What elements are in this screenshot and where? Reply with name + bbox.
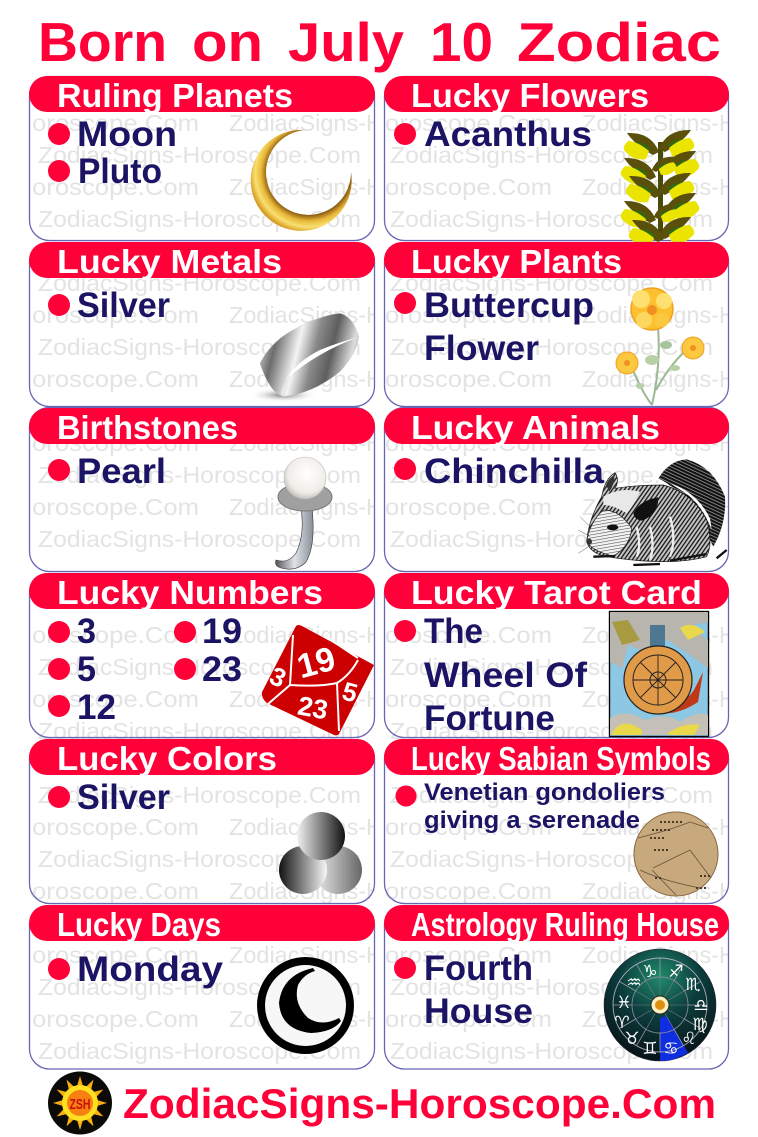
list: buttercup flower: Flower bbox=[424, 329, 539, 368]
text: ZodiacSigns-Horoscope.Com bbox=[390, 718, 713, 744]
icon: sabian chart disc bbox=[634, 812, 718, 896]
heading: lucky flowers bbox=[384, 76, 729, 114]
icon: zodiac wheel: ♑︎ bbox=[642, 962, 658, 982]
heading: lucky animals bbox=[384, 408, 729, 446]
list: numbers: 3 bbox=[77, 612, 96, 651]
icon: zodiac wheel: ♍︎ bbox=[692, 1015, 708, 1035]
icon: red dice bbox=[262, 625, 374, 735]
panel: lucky days bbox=[29, 905, 375, 1069]
list: buttercup flower bbox=[394, 286, 594, 368]
icon: zodiac wheel: ♏︎ bbox=[685, 975, 701, 995]
text: ZodiacSigns-H bbox=[229, 110, 383, 136]
text: oroscope.Com bbox=[385, 878, 552, 904]
list: moon, pluto: Pluto bbox=[78, 152, 162, 191]
text: oroscope.Com bbox=[32, 942, 199, 968]
heading: lucky plants: Lucky Plants bbox=[411, 243, 622, 280]
text: ZodiacSigns-Horoscope.Com bbox=[390, 462, 713, 488]
heading: lucky numbers bbox=[29, 573, 375, 611]
title: on bbox=[192, 11, 263, 73]
list: the wheel of fortune: The bbox=[424, 612, 483, 651]
icon: zodiac wheel bbox=[604, 949, 716, 1061]
text: ZodiacSigns-H bbox=[229, 942, 383, 968]
icon: zodiac wheel: ♐︎ bbox=[668, 962, 684, 982]
text: ZodiacSigns-H bbox=[229, 366, 383, 392]
icon: zodiac wheel: ♎︎ bbox=[693, 996, 709, 1016]
text: ZodiacSigns-H bbox=[582, 1006, 736, 1032]
list: moon, pluto: Moon bbox=[77, 115, 177, 154]
text: ZodiacSigns-H bbox=[229, 814, 383, 840]
heading: birthstones bbox=[29, 408, 375, 446]
icon: acanthus flower bbox=[621, 130, 699, 246]
text: ZodiacSigns-Horoscope.Com bbox=[390, 270, 713, 296]
text: ZodiacSigns-H bbox=[229, 622, 383, 648]
panel: birthstones bbox=[29, 408, 375, 572]
text: oroscope.Com bbox=[32, 302, 199, 328]
list: the wheel of fortune: Wheel Of bbox=[424, 656, 587, 695]
panel: astrology ruling house bbox=[384, 905, 729, 1069]
text: oroscope.Com bbox=[32, 366, 199, 392]
text: oroscope.Com bbox=[32, 494, 199, 520]
list: buttercup flower: Buttercup bbox=[424, 286, 594, 325]
text: ZodiacSigns-H bbox=[229, 430, 383, 456]
text: ZodiacSigns-H bbox=[229, 1006, 383, 1032]
text: ZodiacSigns-Horoscope.Com bbox=[390, 654, 713, 680]
icon: chinchilla sketch bbox=[578, 459, 727, 565]
text: oroscope.Com bbox=[385, 430, 552, 456]
panel: lucky tarot card bbox=[384, 573, 729, 738]
text: ZodiacSigns-H bbox=[229, 302, 383, 328]
text: oroscope.Com bbox=[385, 814, 552, 840]
text: oroscope.Com bbox=[385, 622, 552, 648]
heading: lucky days bbox=[29, 905, 375, 943]
text: ZodiacSigns-Horoscope.Com bbox=[38, 526, 361, 552]
title bbox=[38, 11, 721, 73]
icon: zodiac wheel: ♋︎ bbox=[663, 1039, 679, 1059]
text: ZodiacSigns-H bbox=[582, 366, 736, 392]
text: ZodiacSigns-H bbox=[582, 174, 736, 200]
text: ZodiacSigns-Horoscope.Com bbox=[38, 142, 361, 168]
panel: lucky numbers bbox=[29, 573, 375, 738]
icon: zodiac wheel: ♓︎ bbox=[616, 993, 632, 1013]
list: numbers: 23 bbox=[202, 650, 242, 689]
text: ZodiacSigns-Horoscope.Com bbox=[38, 782, 361, 808]
text: ZodiacSigns-H bbox=[582, 494, 736, 520]
list: numbers: 19 bbox=[202, 612, 242, 651]
heading: lucky animals: Lucky Animals bbox=[411, 409, 660, 446]
heading: birthstones: Birthstones bbox=[57, 409, 238, 446]
text: ZodiacSigns-H bbox=[582, 942, 736, 968]
icon: red dice: 19 bbox=[293, 640, 339, 686]
panel: ruling planets bbox=[29, 76, 375, 240]
list: silver: Silver bbox=[77, 286, 170, 325]
text: ZodiacSigns-Horoscope.Com bbox=[390, 142, 713, 168]
text: ZodiacSigns-Horoscope.Com bbox=[38, 270, 361, 296]
list: the wheel of fortune: Fortune bbox=[424, 699, 555, 738]
text: ZodiacSigns-Horoscope.Com bbox=[38, 974, 361, 1000]
panel: lucky plants bbox=[384, 242, 729, 406]
list: numbers bbox=[48, 612, 242, 727]
heading: ruling planets bbox=[29, 76, 375, 114]
icon: red dice: 3 bbox=[265, 660, 291, 694]
text: oroscope.Com bbox=[385, 942, 552, 968]
text: ZodiacSigns-Horoscope.Com bbox=[390, 782, 713, 808]
text: ZodiacSigns-Horoscope.Com bbox=[38, 334, 361, 360]
icon: red dice: 5 bbox=[339, 676, 361, 708]
heading: lucky metals bbox=[29, 242, 375, 280]
text: ZodiacSigns-Horoscope.Com bbox=[390, 1038, 713, 1064]
text: oroscope.Com bbox=[385, 494, 552, 520]
text: ZodiacSigns-Horoscope.Com bbox=[38, 718, 361, 744]
text: ZodiacSigns-H bbox=[582, 814, 736, 840]
text: oroscope.Com bbox=[385, 1006, 552, 1032]
text: oroscope.Com bbox=[385, 302, 552, 328]
text: ZodiacSigns-Horoscope.Com bbox=[38, 462, 361, 488]
text: oroscope.Com bbox=[32, 110, 199, 136]
list: numbers: 5 bbox=[77, 650, 96, 689]
text: ZodiacSigns-Horoscope.Com bbox=[38, 1038, 361, 1064]
heading: lucky numbers: Lucky Numbers bbox=[57, 574, 323, 611]
list: acanthus: Acanthus bbox=[424, 115, 592, 154]
panel: lucky flowers bbox=[384, 76, 729, 246]
text: ZodiacSigns-H bbox=[229, 494, 383, 520]
text: ZodiacSigns-Horoscope.Com bbox=[390, 974, 713, 1000]
title: 10 bbox=[430, 11, 493, 73]
text: ZodiacSigns-Horoscope.Com bbox=[390, 526, 713, 552]
icon: silver ring bbox=[248, 313, 359, 402]
list: venetian gondoliers: Venetian gondoliers bbox=[424, 779, 665, 806]
text: oroscope.Com bbox=[32, 686, 199, 712]
footer website text: ZodiacSigns-Horoscope.Com bbox=[123, 1080, 716, 1127]
title: Born bbox=[38, 11, 167, 73]
heading: ruling planets: Ruling Planets bbox=[57, 77, 293, 114]
icon: silver gradient circles bbox=[279, 812, 362, 894]
icon: black crescent in circle bbox=[261, 961, 350, 1050]
text: ZodiacSigns-Horoscope.Com bbox=[390, 846, 713, 872]
text: ZodiacSigns-H bbox=[582, 686, 736, 712]
icon: zodiac wheel: ♈︎ bbox=[614, 1013, 630, 1033]
list: fourth house: House bbox=[424, 992, 533, 1031]
icon: wheel of fortune tarot card bbox=[610, 612, 708, 736]
list: pearl: Pearl bbox=[77, 452, 166, 491]
text: ZodiacSigns-H bbox=[582, 302, 736, 328]
text: oroscope.Com bbox=[32, 174, 199, 200]
text: ZodiacSigns-Horoscope.Com bbox=[38, 206, 361, 232]
list: monday: Monday bbox=[77, 950, 224, 989]
icon: zodiac wheel: ♊︎ bbox=[642, 1039, 658, 1059]
heading: lucky tarot card: Lucky Tarot Card bbox=[411, 574, 702, 611]
list: chinchilla: Chinchilla bbox=[424, 452, 605, 491]
text: oroscope.Com bbox=[385, 686, 552, 712]
text: ZodiacSigns-Horoscope.Com bbox=[38, 846, 361, 872]
panel: lucky metals bbox=[29, 242, 375, 406]
text: oroscope.Com bbox=[32, 1006, 199, 1032]
text: oroscope.Com bbox=[32, 622, 199, 648]
text: oroscope.Com bbox=[32, 430, 199, 456]
list: venetian gondoliers: giving a serenade bbox=[424, 807, 640, 834]
icon: zodiac wheel: ♌︎ bbox=[681, 1029, 697, 1049]
heading: lucky colors bbox=[29, 739, 375, 777]
title: July bbox=[288, 11, 404, 73]
text: ZodiacSigns-Horoscope.Com bbox=[390, 206, 713, 232]
list: numbers: 12 bbox=[77, 688, 116, 727]
text: ZodiacSigns-H bbox=[229, 686, 383, 712]
text: ZodiacSigns-H bbox=[229, 174, 383, 200]
list: the wheel of fortune bbox=[394, 612, 587, 738]
text: oroscope.Com bbox=[385, 366, 552, 392]
text: ZodiacSigns-H bbox=[229, 878, 383, 904]
panel: lucky animals bbox=[384, 408, 729, 572]
list: fourth house bbox=[394, 949, 533, 1031]
text: ZodiacSigns-Horoscope.Com bbox=[390, 334, 713, 360]
heading: lucky plants bbox=[384, 242, 729, 280]
list: fourth house: Fourth bbox=[424, 949, 533, 988]
text: oroscope.Com bbox=[385, 174, 552, 200]
list: venetian gondoliers bbox=[396, 779, 665, 834]
text: oroscope.Com bbox=[32, 878, 199, 904]
footer logo bbox=[48, 1072, 112, 1134]
title: Zodiac bbox=[517, 11, 721, 73]
icon: red dice: 23 bbox=[295, 691, 330, 725]
icon: golden crescent moon bbox=[251, 130, 352, 231]
list: moon, pluto bbox=[48, 115, 177, 191]
icon: zodiac wheel: ♉︎ bbox=[624, 1029, 640, 1049]
footer logo: ZSH bbox=[70, 1096, 90, 1113]
icon: pearl ring bbox=[276, 457, 332, 569]
heading: lucky days: Lucky Days bbox=[57, 906, 221, 943]
heading: lucky colors: Lucky Colors bbox=[57, 740, 277, 777]
panel: lucky sabian symbols bbox=[384, 739, 729, 904]
list: silver: Silver bbox=[77, 778, 170, 817]
text: ZodiacSigns-H bbox=[582, 430, 736, 456]
icon: zodiac wheel: ♒︎ bbox=[626, 973, 642, 993]
icon: buttercup flower bbox=[616, 288, 704, 405]
heading: lucky flowers: Lucky Flowers bbox=[411, 77, 649, 114]
text: ZodiacSigns-Horoscope.Com bbox=[38, 654, 361, 680]
text: ZodiacSigns-H bbox=[582, 622, 736, 648]
panel: lucky colors bbox=[29, 739, 375, 904]
text: oroscope.Com bbox=[385, 110, 552, 136]
text: ZodiacSigns-H bbox=[582, 878, 736, 904]
heading: lucky metals: Lucky Metals bbox=[57, 243, 282, 280]
text: oroscope.Com bbox=[32, 814, 199, 840]
text: ZodiacSigns-H bbox=[582, 110, 736, 136]
